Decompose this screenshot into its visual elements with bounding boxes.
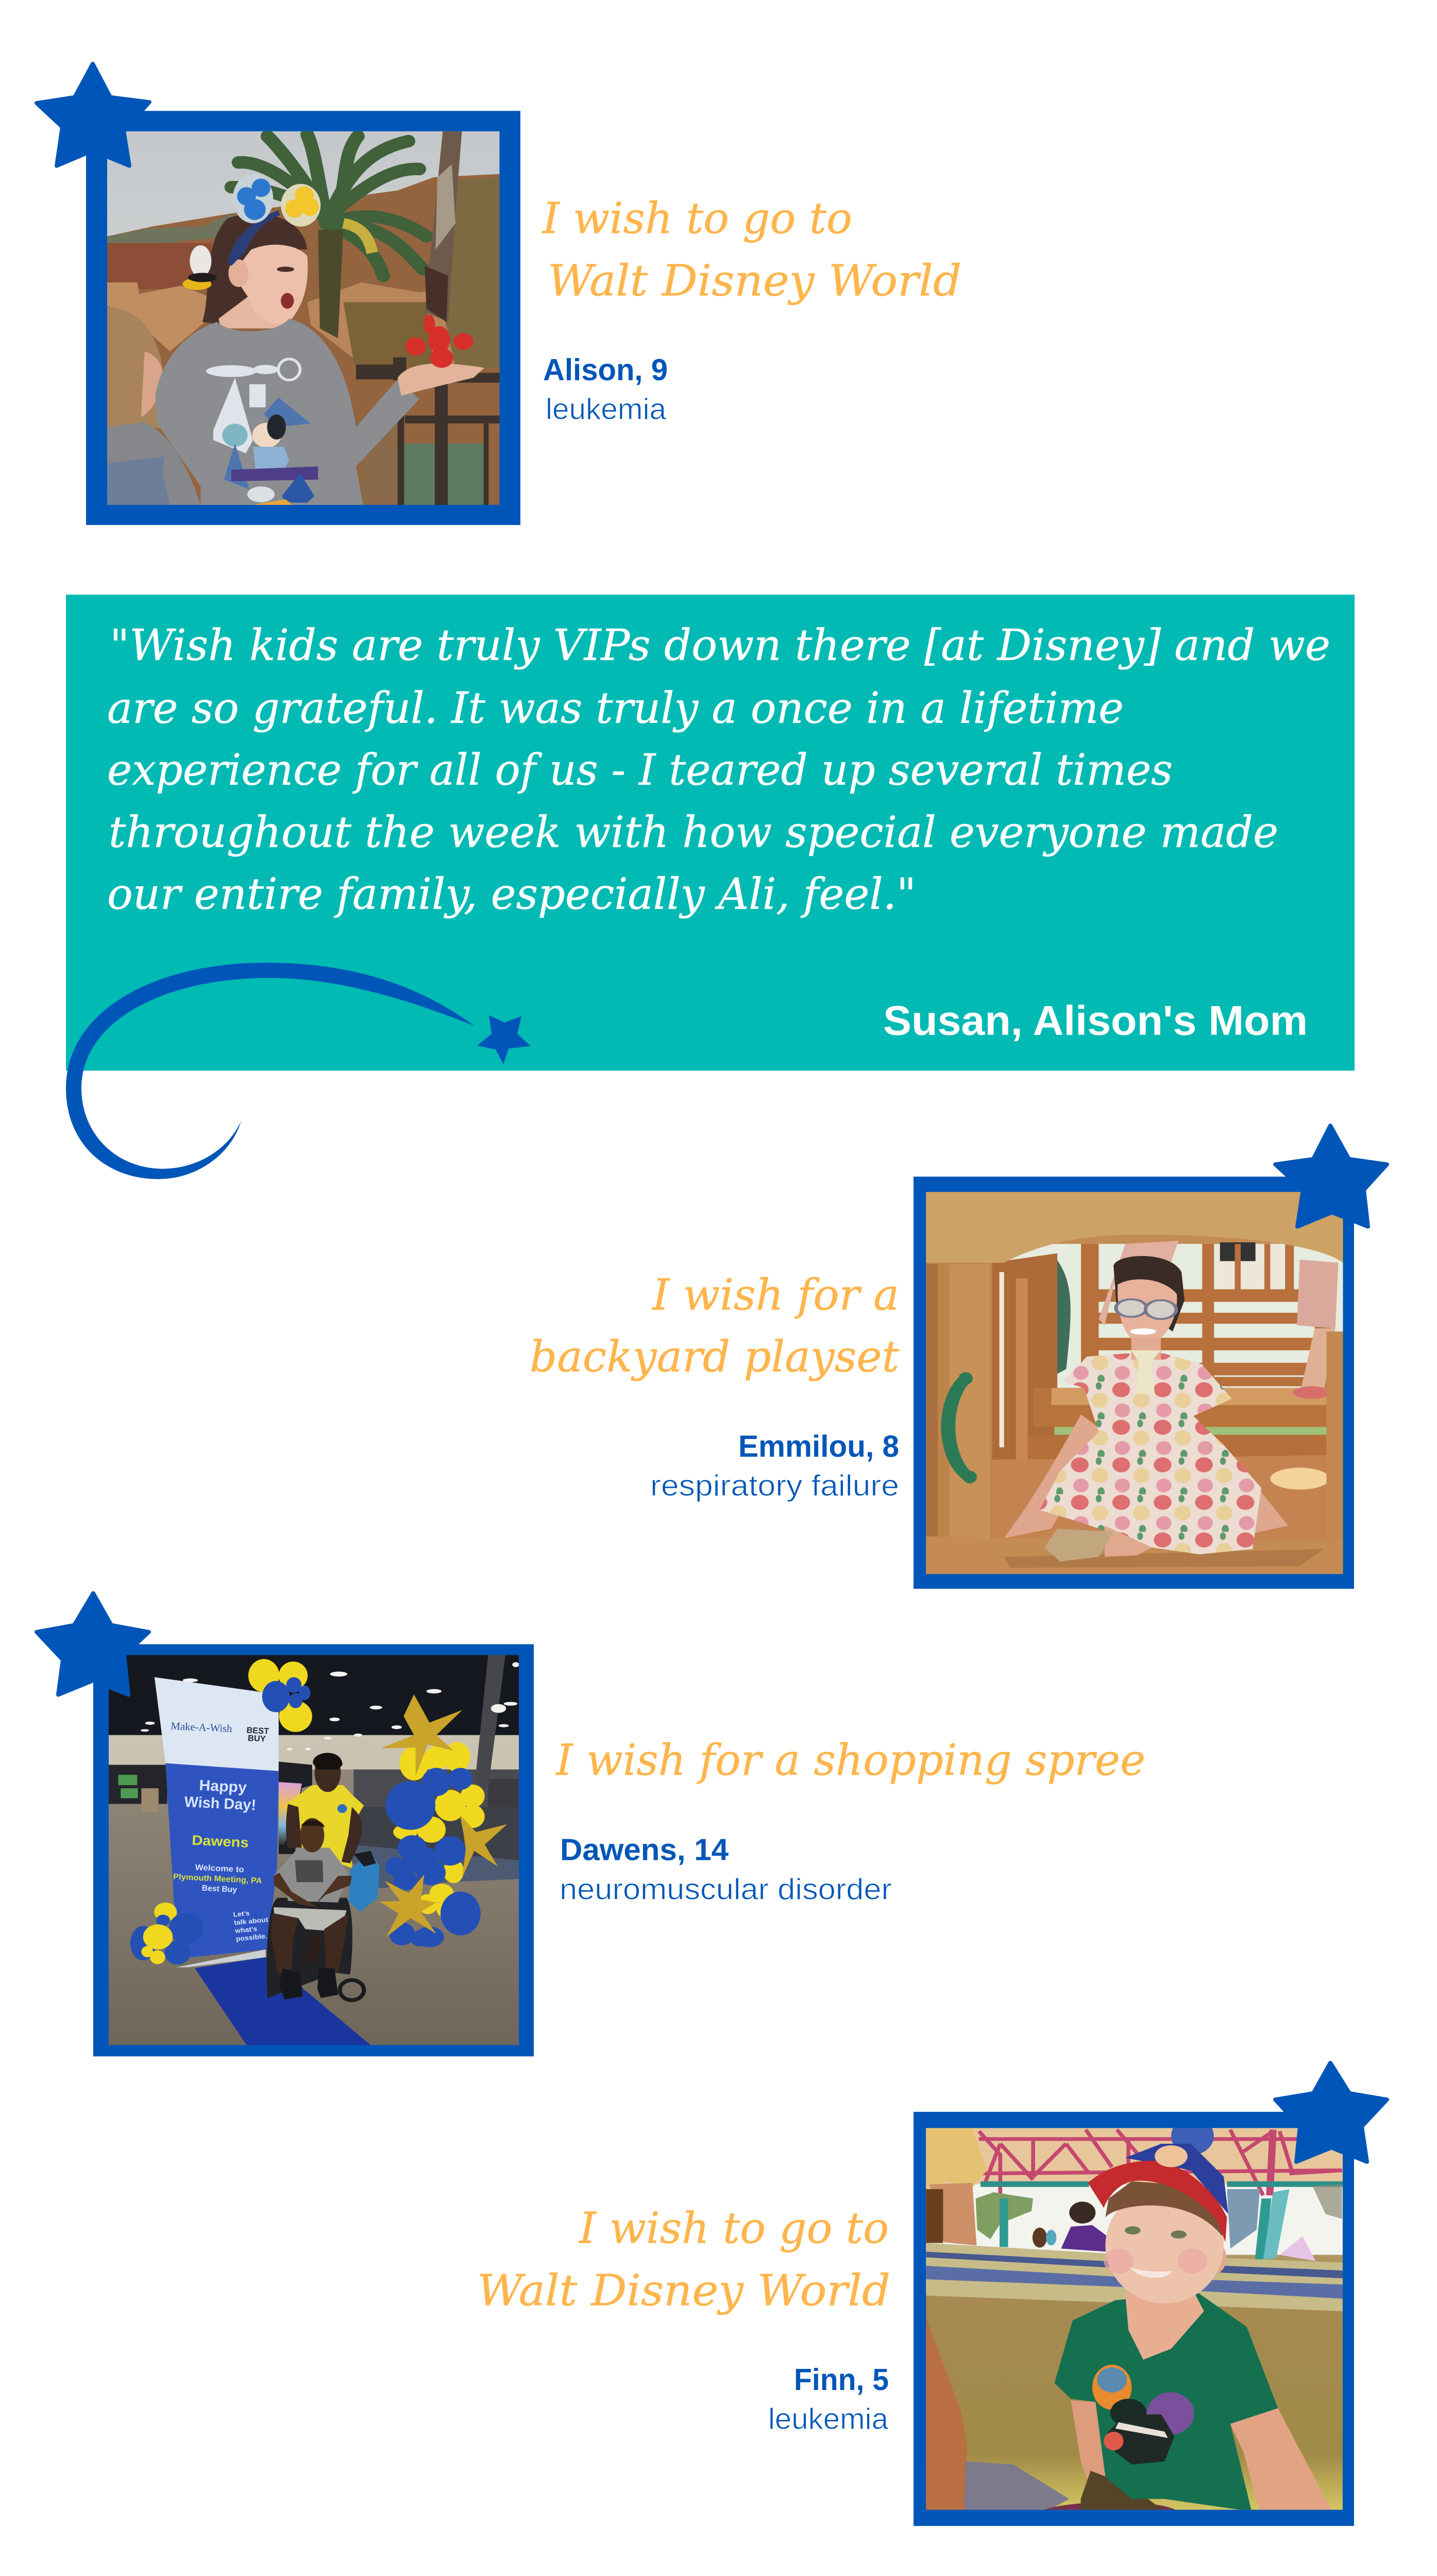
quote text: are so grateful. It was truly a once in a lifetime (107, 683, 1124, 733)
photo: Dawens at Best Buy: Wish Day! (184, 1793, 257, 1814)
wish heading: Emmilou (530, 1270, 899, 1382)
condition: Dawens: neuromuscular disorder (560, 1873, 892, 1906)
photo: Dawens at Best Buy (109, 1655, 519, 2045)
photo: Dawens at Best Buy: what’s (234, 1925, 258, 1935)
photo: Dawens at Best Buy: talk about (233, 1916, 269, 1926)
icon: star (37, 1593, 149, 1695)
photo: Dawens at Best Buy: BUY (248, 1733, 266, 1743)
section: Emmilou wish (530, 1126, 1387, 1589)
icon: shooting star (66, 963, 531, 1179)
condition: Emmilou: respiratory failure (650, 1469, 899, 1502)
photo: Dawens at Best Buy: possible. (235, 1933, 267, 1943)
photo frame: Alison (86, 111, 520, 525)
quote text: experience for all of us - I teared up several times (107, 745, 1173, 795)
panel: quote (66, 595, 1355, 1071)
wish heading: Dawens: I wish for a shopping spree (555, 1735, 1145, 1785)
photo frame: Emmilou (914, 1177, 1354, 1589)
wish heading: Finn: Walt Disney World (477, 2265, 890, 2316)
quote text: throughout the week with how special everyone made (109, 807, 1278, 857)
icon: star (1275, 2063, 1387, 2162)
photo: Dawens at Best Buy: BEST (246, 1725, 269, 1736)
name: Dawens: Dawens, 14 (560, 1833, 729, 1867)
photo frame: Finn (914, 2112, 1354, 2526)
name: Finn: Finn, 5 (794, 2362, 889, 2397)
section: Dawens wish (37, 1593, 1145, 2056)
condition: Finn: leukemia (768, 2403, 888, 2435)
wish heading: Alison (542, 193, 961, 306)
quote text: "Wish kids are truly VIPs down there [at Disney] and we (110, 620, 1330, 670)
wish heading: Finn (477, 2203, 890, 2316)
quote attribution: Susan, Alison's Mom (883, 997, 1308, 1044)
photo: Dawens at Best Buy: Let’s (233, 1909, 250, 1918)
section: Finn wish (477, 2063, 1387, 2526)
photo frame: Dawens (93, 1644, 534, 2056)
icon: star (37, 64, 149, 166)
name: Emmilou: Emmilou, 8 (738, 1429, 899, 1463)
wish heading: Alison: I wish to go to (542, 193, 852, 244)
photo: Dawens at Best Buy: Plymouth Meeting, PA (173, 1872, 262, 1886)
name: Alison: Alison, 9 (543, 352, 668, 387)
icon: star (1275, 1126, 1387, 1227)
photo: Dawens at Best Buy: Best Buy (201, 1883, 238, 1894)
wish heading: Alison: Walt Disney World (548, 256, 961, 306)
section: Alison wish (37, 64, 961, 525)
wish heading: Emmilou: backyard playset (530, 1332, 899, 1382)
quote text (107, 620, 1330, 919)
wish heading: Emmilou: I wish for a (651, 1270, 899, 1320)
photo: Emmilou on playset (926, 1192, 1343, 1574)
photo: Finn at Disney (926, 2117, 1343, 2512)
wish heading: Finn: I wish to go to (578, 2203, 889, 2253)
quote text: our entire family, especially Ali, feel." (107, 869, 916, 919)
photo: Alison at Disney (107, 131, 499, 505)
photo: Dawens at Best Buy: Welcome to (195, 1862, 244, 1874)
photo: Dawens at Best Buy: Make-A-Wish (171, 1720, 232, 1735)
condition: Alison: leukemia (546, 393, 666, 426)
photo: Dawens at Best Buy: Dawens (192, 1833, 249, 1850)
photo: Dawens at Best Buy: Happy (199, 1776, 247, 1796)
